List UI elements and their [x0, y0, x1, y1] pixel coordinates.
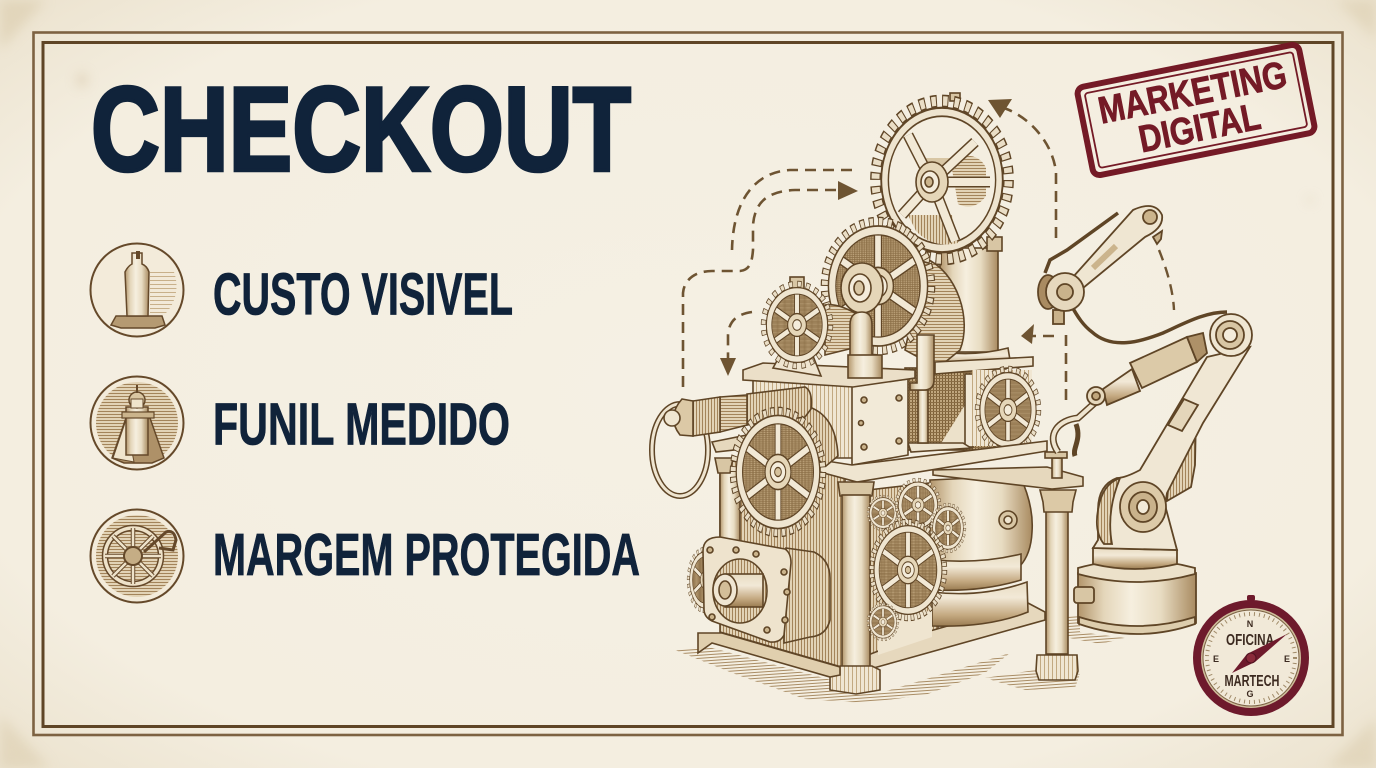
- arrow: toward tower: [1021, 324, 1054, 344]
- robot lower arm: [1093, 347, 1250, 550]
- item: margem protegida: [90, 510, 640, 602]
- stamp text: marketing: MARKETING: [1095, 54, 1290, 133]
- front column: [830, 482, 880, 694]
- front gear: [733, 412, 823, 532]
- right pillar and hook: [1036, 400, 1098, 680]
- robot arm: [1038, 206, 1252, 634]
- arrow: down to small gear: [720, 312, 752, 376]
- compass cardinals: [1213, 619, 1290, 699]
- upper deck box: [743, 335, 1033, 465]
- icon: ship wheel: [90, 510, 184, 602]
- compass needle: [1232, 634, 1287, 673]
- robot elbow: [1210, 314, 1252, 356]
- engine box: [688, 537, 840, 677]
- mid deck plates: [820, 441, 1083, 489]
- label: custo visivel: CUSTO VISIVEL: [213, 262, 513, 328]
- compass cardinals: E: [1213, 654, 1219, 664]
- right gear: [972, 369, 1039, 451]
- compass cardinals: N: [1247, 619, 1253, 629]
- middle gear: [825, 222, 931, 350]
- back wall and base plate: [868, 482, 1045, 669]
- stamp text: digital: DIGITAL: [1135, 96, 1264, 161]
- robot base: [1074, 548, 1196, 634]
- tower column: [930, 237, 1010, 369]
- arrow: rising to top gear: [988, 99, 1056, 238]
- right cylinder: [930, 476, 1032, 626]
- robot piston: [1087, 333, 1207, 405]
- compass text: oficina: OFICINA: [1226, 632, 1274, 649]
- machine: [652, 93, 1098, 694]
- label: margem protegida: MARGEM PROTEGIDA: [213, 522, 640, 588]
- lower gear cluster: [868, 480, 965, 655]
- cannon and ring: [652, 387, 838, 496]
- cable: [1070, 303, 1227, 343]
- top gear: [876, 93, 1008, 259]
- compass cardinals: E: [1284, 654, 1290, 664]
- title: CHECKOUT: [91, 62, 631, 196]
- item: custo visivel: [90, 244, 513, 336]
- arrow: long path from cannon to top gear: [683, 181, 858, 387]
- compass cardinals: G: [1246, 689, 1254, 699]
- lower body block: [715, 458, 845, 668]
- label: funil medido: FUNIL MEDIDO: [213, 392, 510, 458]
- icon: funnel lamp: [90, 376, 184, 470]
- dashed flow arrows: [683, 99, 1174, 402]
- feature list: [90, 244, 640, 602]
- arrow: curved from robot arm: [1159, 250, 1174, 310]
- curved housing: [905, 258, 964, 368]
- upper link: [1038, 206, 1162, 324]
- item: funil medido: [90, 376, 510, 470]
- compass text: martech: MARTECH: [1224, 673, 1280, 690]
- arrow: vertical from arm: [1065, 335, 1067, 402]
- compass badge: [1193, 595, 1309, 716]
- icon: bottle jack: [90, 244, 184, 336]
- small gear with pipe: [764, 277, 882, 378]
- ground shadow hatching: [675, 614, 1125, 703]
- arrow: top loop outer: [732, 170, 852, 250]
- stamp: marketing digital: [1076, 44, 1316, 176]
